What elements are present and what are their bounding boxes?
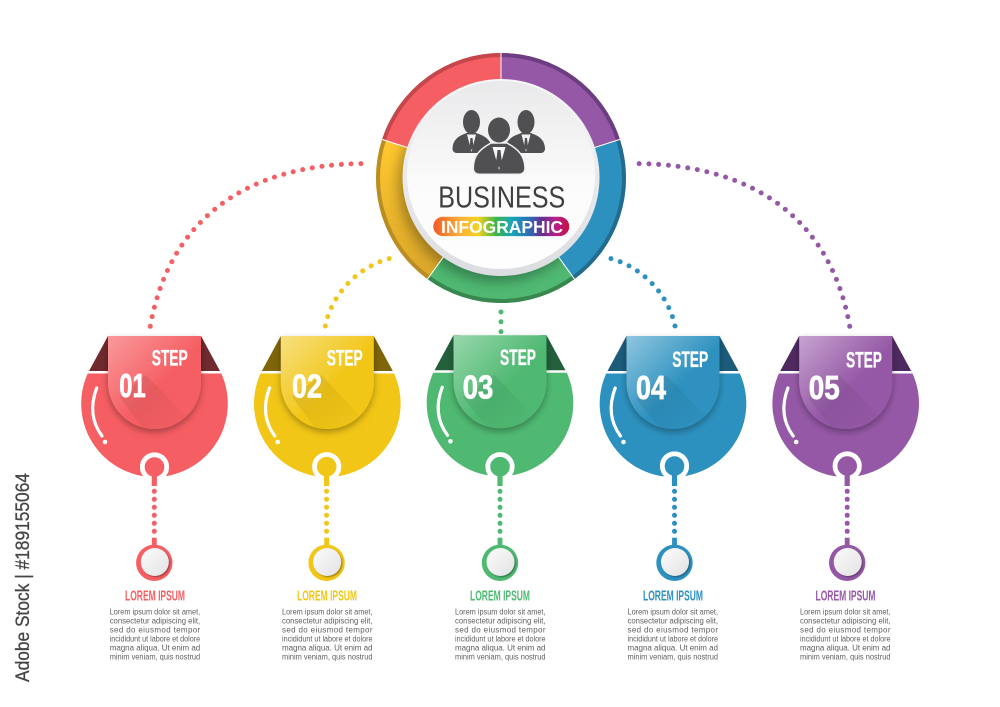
text block: step 03: consectetur adipiscing elit, [455, 616, 546, 625]
step 03 panel [427, 335, 573, 661]
badge: step 05: 05 [809, 369, 840, 406]
side stock label: Adobe Stock | #189155064 [13, 473, 34, 682]
step 01 panel [81, 336, 228, 661]
text block: step 03: incididunt ut labore et dolore [455, 634, 546, 643]
text block: step 04: consectetur adipiscing elit, [628, 616, 718, 625]
text block: step 04: sed do eiusmod tempor [628, 625, 718, 634]
text block: step 05: minim veniam, quis nostrud [800, 652, 890, 661]
badge: step 02 [254, 336, 401, 479]
text block: step 01: incididunt ut labore et dolore [110, 634, 201, 643]
badge: step 02: 02 [292, 368, 322, 405]
ring segment: purple [501, 53, 620, 150]
text block: step 03: LOREM IPSUM [470, 588, 530, 605]
ring segment: green [428, 251, 574, 303]
text block: step 03: Lorem ipsum dolor sit amet, [455, 608, 546, 617]
text block: step 05: consectetur adipiscing elit, [800, 616, 890, 625]
text block: step 05: incididunt ut labore et dolore [800, 634, 891, 643]
text block: step 03 [455, 588, 546, 661]
badge: step 03: STEP [500, 345, 536, 370]
ring segment: yellow [376, 139, 448, 279]
badge: step 04: 04 [636, 369, 667, 406]
central disc [402, 79, 600, 276]
text block: step 02: minim veniam, quis nostrud [282, 652, 372, 661]
text block: step 04: LOREM IPSUM [643, 588, 703, 605]
text block: step 04: magna aliqua. Ut enim ad [628, 643, 718, 652]
badge: step 02: STEP [327, 346, 363, 371]
text block: step 03: minim veniam, quis nostrud [455, 652, 546, 661]
text block: step 01: magna aliqua. Ut enim ad [110, 643, 200, 652]
text block: step 05: LOREM IPSUM [816, 588, 876, 605]
dotted connector: red arc [150, 164, 362, 326]
text block: step 02: sed do eiusmod tempor [282, 625, 373, 634]
connector with end node [829, 470, 865, 581]
badge: step 01: 01 [119, 367, 146, 404]
text block: step 03: sed do eiusmod tempor [455, 625, 546, 634]
dotted connector: blue arc [610, 258, 675, 326]
ring segment: red [382, 53, 501, 150]
central hub [376, 53, 626, 303]
text block: step 01: Lorem ipsum dolor sit amet, [110, 608, 200, 617]
text block: step 01: sed do eiusmod tempor [110, 625, 201, 634]
text block: step 02: magna aliqua. Ut enim ad [282, 643, 372, 652]
text block: step 04: minim veniam, quis nostrud [628, 652, 718, 661]
connector with end node [136, 470, 172, 581]
badge: step 04: STEP [672, 347, 708, 372]
dotted connector: yellow arc [325, 258, 390, 326]
text block: step 02: LOREM IPSUM [297, 588, 357, 605]
text block: step 01: consectetur adipiscing elit, [110, 616, 200, 625]
text block: step 05: Lorem ipsum dolor sit amet, [800, 608, 890, 617]
text block: step 04: Lorem ipsum dolor sit amet, [628, 608, 718, 617]
text block: step 02 [282, 588, 373, 661]
connector with end node [482, 470, 518, 581]
ring segment: blue [554, 139, 626, 279]
badge: step 01: STEP [152, 346, 188, 370]
dotted connector: green line [498, 312, 504, 332]
text block: step 05 [800, 588, 891, 661]
connector with end node [308, 470, 345, 581]
text block: step 01: minim veniam, quis nostrud [110, 652, 200, 661]
badge: step 03: 03 [463, 368, 493, 405]
text block: step 03: magna aliqua. Ut enim ad [455, 643, 546, 652]
badge: step 05 [772, 336, 919, 478]
text block: step 04 [628, 588, 718, 661]
step 02 panel [254, 336, 401, 661]
heading: BUSINESS: BUSINESS [438, 181, 565, 215]
text block: step 01 [110, 588, 201, 661]
step 04 panel [600, 336, 746, 661]
text block: step 05: sed do eiusmod tempor [800, 625, 891, 634]
text block: step 02: Lorem ipsum dolor sit amet, [282, 608, 372, 617]
badge: INFOGRAPHIC: INFOGRAPHIC [441, 217, 563, 237]
badge: step 03 [427, 335, 573, 479]
dotted connector: purple arc [638, 164, 850, 326]
step 05 panel [772, 336, 919, 661]
icon: business people [452, 110, 545, 174]
text block: step 02: incididunt ut labore et dolore [282, 634, 373, 643]
badge: step 05: STEP [846, 347, 882, 372]
connector with end node [656, 470, 693, 581]
text block: step 04: incididunt ut labore et dolore [628, 634, 718, 643]
text block: step 01: LOREM IPSUM [125, 588, 185, 605]
text block: step 05: magna aliqua. Ut enim ad [800, 643, 890, 652]
badge: step 04 [600, 336, 746, 478]
badge: step 01 [81, 336, 228, 479]
text block: step 02: consectetur adipiscing elit, [282, 616, 372, 625]
